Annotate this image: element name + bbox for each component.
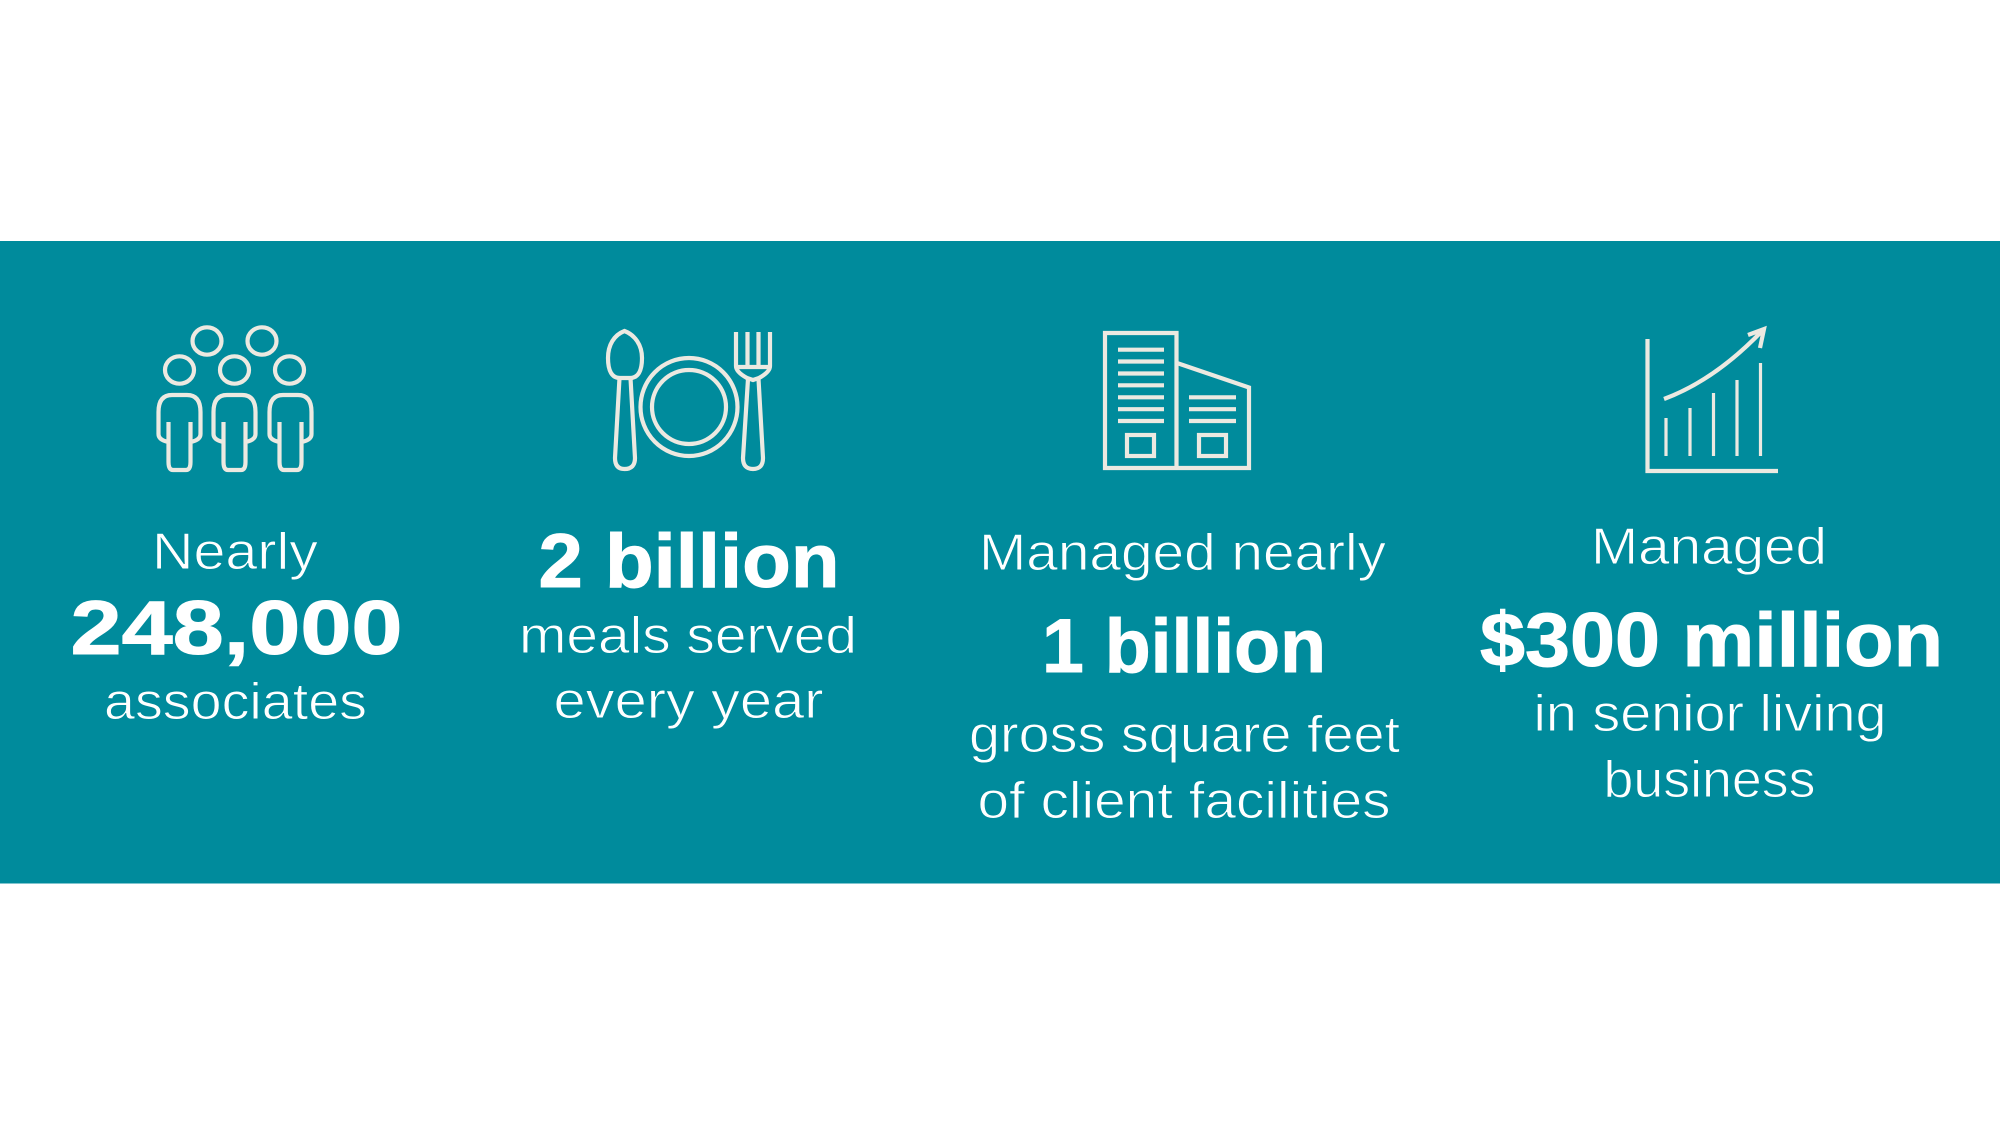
text: managed nearly 1 billion gross square feet of client facilities: 1 billion — [1042, 604, 1326, 689]
panel: meals — [519, 331, 857, 730]
text: managed nearly 1 billion gross square feet of client facilities: of client facilities — [978, 772, 1390, 830]
text: managed $300 million in senior living business — [1480, 518, 1943, 809]
text: 2 billion meals served every year: 2 billion — [538, 519, 840, 604]
text: nearly 248,000 associates — [70, 523, 402, 731]
text: 2 billion meals served every year: every year — [554, 672, 824, 730]
text: managed $300 million in senior living business: $300 million — [1480, 598, 1943, 683]
panel: associates — [70, 327, 402, 731]
teal band — [0, 241, 2000, 884]
text: nearly 248,000 associates: Nearly — [152, 523, 318, 581]
panel: senior living — [1480, 329, 1943, 809]
text: managed $300 million in senior living business: Managed — [1591, 518, 1827, 576]
icon: group of people — [158, 327, 312, 470]
text: nearly 248,000 associates: 248,000 — [70, 586, 402, 671]
text: managed $300 million in senior living business: business — [1604, 751, 1816, 809]
icon: buildings — [1105, 333, 1249, 468]
text: managed nearly 1 billion gross square feet of client facilities: Managed nearly — [979, 524, 1386, 582]
text: 2 billion meals served every year: meals served — [519, 607, 857, 665]
icon: rising bar chart with arrow — [1648, 329, 1778, 471]
text: managed nearly 1 billion gross square feet of client facilities: gross square feet — [969, 706, 1401, 764]
text: managed $300 million in senior living business: in senior living — [1534, 685, 1886, 743]
text: managed nearly 1 billion gross square feet of client facilities — [969, 524, 1401, 830]
text: nearly 248,000 associates: associates — [104, 673, 367, 731]
panel: facilities — [969, 333, 1401, 830]
icon: plate with spoon and fork — [608, 331, 770, 469]
text: 2 billion meals served every year — [519, 519, 857, 730]
